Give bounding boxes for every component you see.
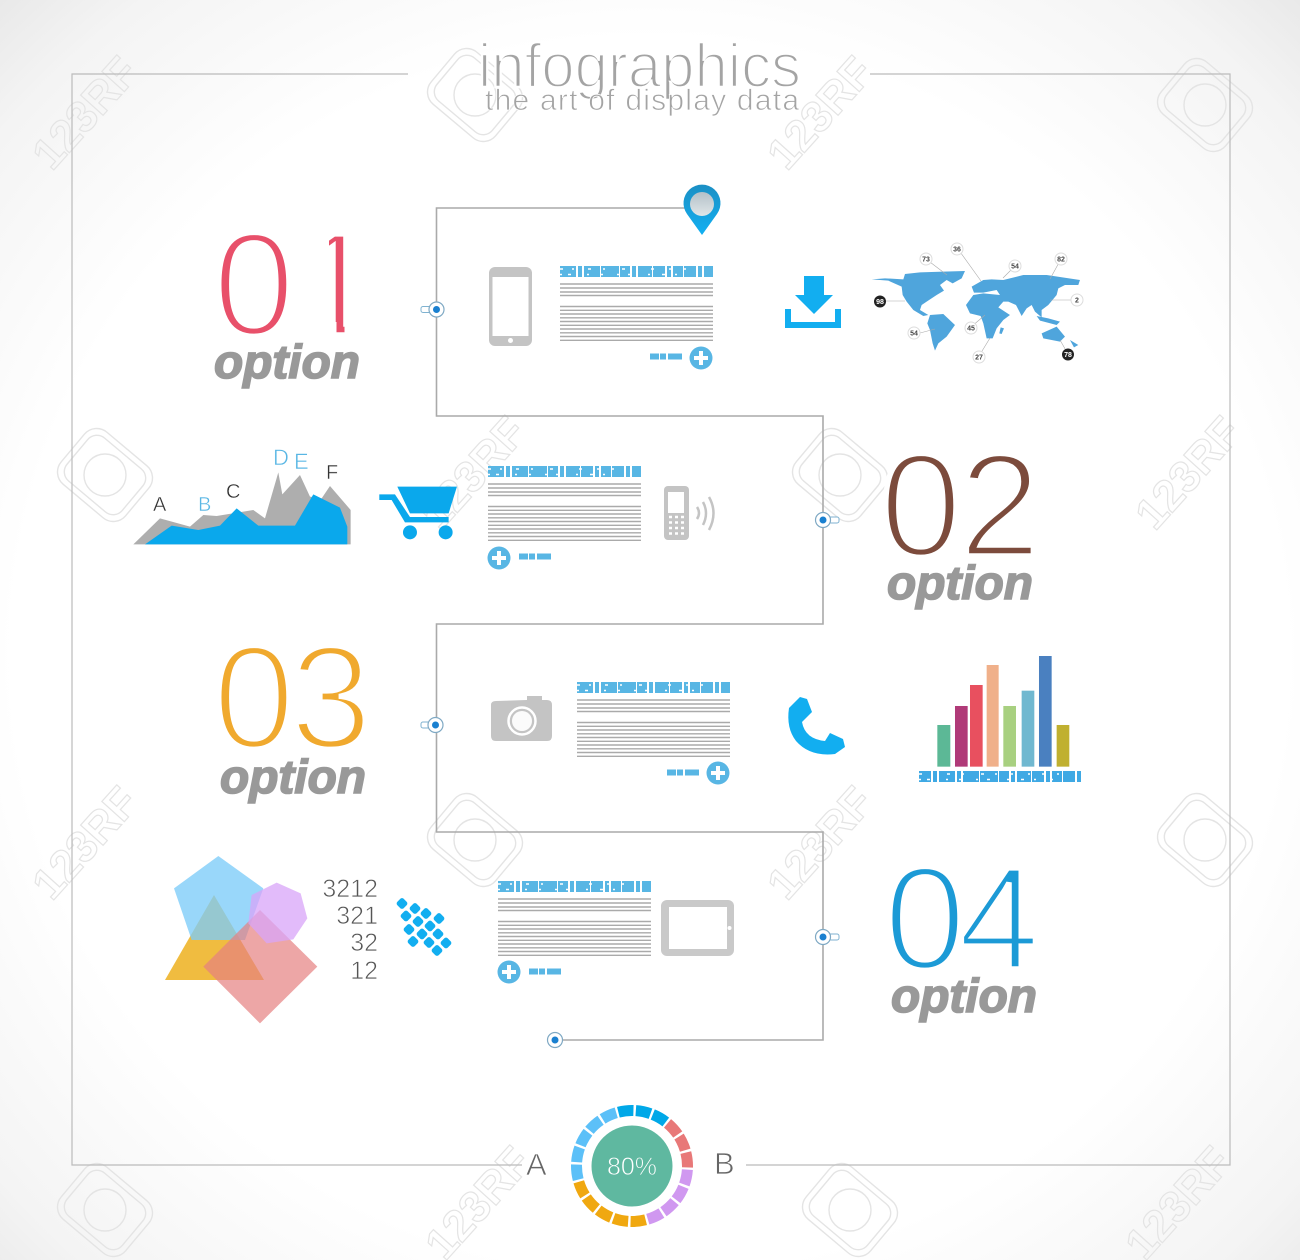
gauge label A: A (526, 1147, 547, 1182)
plus button 1 (690, 346, 712, 370)
plus button 2 (488, 546, 510, 570)
area chart (133, 445, 351, 544)
map label 54 south (908, 327, 920, 339)
map label 54 north: 54 (1011, 264, 1019, 270)
title: infographics (478, 32, 801, 101)
text: 123RF (23, 778, 148, 909)
bar chart (919, 656, 1083, 780)
number list (322, 875, 378, 985)
map label 45 (965, 322, 977, 334)
map label 2: 2 (1075, 298, 1079, 304)
node 4 (816, 930, 839, 944)
map label 27: 27 (975, 354, 983, 362)
map label 73: 73 (922, 256, 930, 264)
map label 45: 45 (967, 326, 975, 332)
overlapping shapes diagram (165, 856, 317, 1023)
link 3 (667, 772, 699, 774)
icon: shopping cart (379, 487, 457, 539)
chart label C: C (226, 481, 240, 503)
number 02: 02 (880, 424, 1041, 588)
number list: 12 (350, 957, 378, 985)
link 2 (519, 556, 551, 558)
icon: smartphone (489, 267, 532, 346)
node 2 (816, 512, 839, 528)
link 1 (650, 356, 682, 358)
donut gauge (554, 1088, 710, 1244)
plus button 3 (706, 762, 730, 784)
text block 2 (488, 469, 641, 540)
chart label D: D (273, 445, 289, 470)
icon: download (785, 276, 841, 328)
text: 123RF (758, 48, 883, 179)
option label 2: option (887, 556, 1033, 609)
map label 98 (874, 296, 886, 308)
number list: 3212 (322, 875, 378, 903)
icon: mobile phone with signal (664, 486, 714, 540)
map label 36 (951, 243, 963, 255)
number 04: 04 (884, 837, 1040, 1001)
number list: 321 (336, 902, 378, 930)
world map (872, 249, 1080, 356)
icon: tablet (661, 900, 734, 956)
text: 123RF (758, 778, 883, 909)
bar chart caption (919, 774, 1083, 780)
outer frame (72, 74, 1230, 1165)
number 01: 01 (213, 203, 378, 367)
plus button 4 (498, 960, 520, 984)
text block 4 (498, 884, 651, 955)
text block 3 (577, 685, 730, 756)
text: 123RF (411, 408, 536, 539)
link 4 (529, 970, 561, 972)
chart label E: E (294, 449, 309, 474)
gauge value: 80% (607, 1153, 657, 1181)
map pin marker (684, 185, 720, 235)
map label 78 (1062, 348, 1074, 360)
node 3 (421, 718, 443, 732)
icon: camera (491, 696, 552, 741)
map label 82 (1055, 253, 1067, 265)
option label 4: option (891, 969, 1037, 1022)
map label 82: 82 (1057, 256, 1065, 264)
map label 2 (1071, 294, 1083, 306)
option label 3: option (220, 750, 366, 803)
map label 98: 98 (876, 299, 884, 306)
text block 1 (560, 269, 713, 340)
map label 27 (973, 351, 985, 363)
option label 1: option (214, 335, 360, 388)
text: 123RF (1126, 408, 1251, 539)
chart label B: B (198, 494, 211, 516)
number list: 32 (350, 929, 378, 957)
map label 54 south: 54 (910, 330, 918, 338)
number 03: 03 (213, 616, 372, 780)
gauge label B: B (714, 1146, 735, 1181)
map label 78: 78 (1064, 352, 1072, 359)
chart label A: A (153, 494, 167, 516)
map label 73 (920, 253, 932, 265)
chart label F: F (326, 462, 338, 484)
path end node (548, 1032, 562, 1048)
map label 54 north (1009, 260, 1021, 272)
icon: telephone handset (788, 697, 845, 754)
connector path (436, 208, 823, 1040)
subtitle: the art of display data (485, 84, 799, 117)
node 1 (421, 302, 444, 317)
map label 36: 36 (953, 246, 961, 254)
text: 123RF (23, 48, 148, 179)
icon: diamond grid (396, 897, 452, 957)
